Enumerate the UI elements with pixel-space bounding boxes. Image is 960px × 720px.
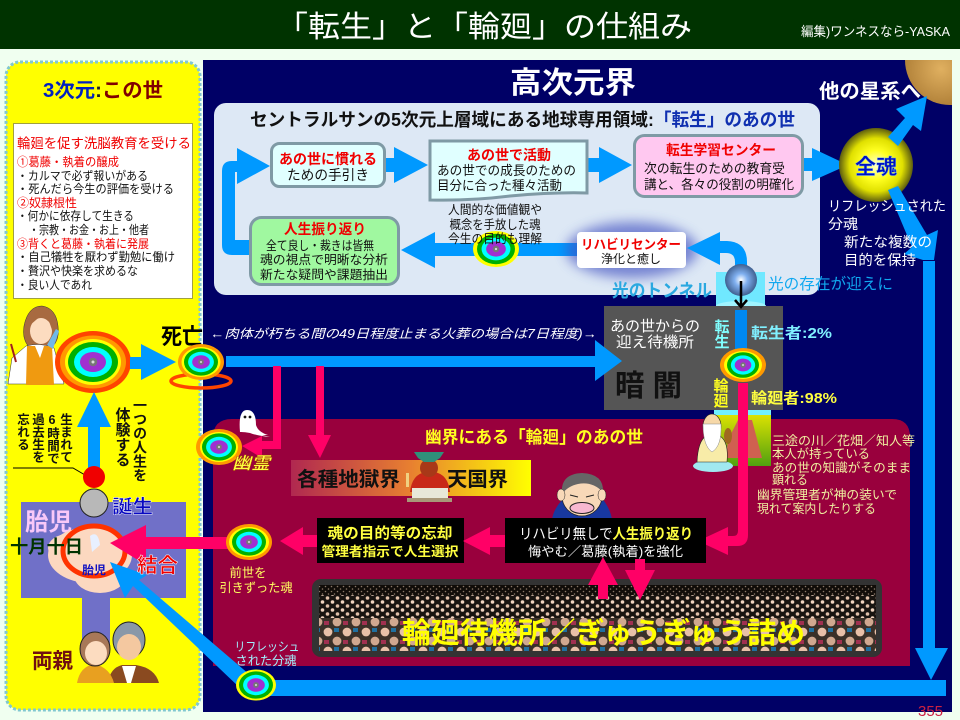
caption: refreshed split soul: 目的を保持 — [844, 252, 916, 268]
caption: refreshed split soul: リフレッシュされた — [828, 198, 946, 214]
caption: refreshed split soul: 新たな複数の — [844, 234, 932, 250]
label: ten months: 十月十日 — [10, 537, 83, 557]
box: life review — [250, 218, 398, 284]
icon: planet — [905, 60, 952, 105]
arrow: samsara path to review — [698, 383, 748, 555]
box: life review: 全て良し・裁きは皆無 — [266, 238, 374, 253]
box: rehabilitation center: リハビリセンター — [581, 237, 681, 252]
caption: soul dragging past life — [220, 565, 293, 595]
arrow: down from whole soul — [888, 186, 938, 260]
page number: 355 — [918, 703, 943, 720]
list items: ・カルマで必ず報いがある — [17, 168, 148, 183]
heading: central sun realm: セントラルサンの5次元上層域にある地球専用領域:「転生」のあの世 — [250, 110, 795, 130]
soul: at death — [171, 344, 231, 388]
heading: higher dimension: 高次元界 — [510, 67, 636, 100]
label: beings of light greet: 光の存在が迎えに — [768, 275, 893, 293]
arrow: life to death — [130, 344, 176, 380]
arrow: black descent — [735, 281, 747, 307]
header — [0, 0, 960, 49]
panel: central sun realm — [214, 103, 820, 295]
label: 2 percent: 転生者:2% — [751, 324, 832, 342]
panel: waiting place darkness: 迎え待機所 — [616, 334, 694, 351]
icon: King Enma — [406, 452, 452, 502]
icon: parents — [77, 622, 159, 683]
label: fetus small: 胎児 — [82, 563, 107, 577]
list items — [17, 154, 175, 292]
label: experience: 体験する — [114, 407, 130, 467]
box: review without rehab: リハビリ無しで人生振り返り — [519, 525, 693, 543]
credit: 編集)ワンネスなら-YASKA — [801, 24, 950, 39]
arrow: long return path — [265, 261, 948, 696]
arrow: to activities — [385, 147, 428, 183]
list items: ③背くと葛藤・執着に発展 — [17, 236, 149, 251]
panel: waiting crowd — [312, 579, 882, 657]
label: forget past life: 生まれて — [58, 412, 72, 463]
soul: after release — [473, 231, 519, 267]
list items: ・贅沢や快楽を求めるな — [17, 263, 138, 278]
caption: released soul: 人間的な価値観や — [448, 202, 542, 217]
panel: waiting place darkness: あの世からの — [610, 318, 700, 335]
icon: union ring — [63, 526, 125, 576]
icon: tunnel of light — [716, 264, 766, 311]
caption: soul dragging past life: 引きずった魂 — [220, 581, 293, 595]
label: reincarnation vertical: 転生 — [712, 318, 730, 349]
soul: living soul with ring — [55, 331, 131, 393]
label: fetus: 胎児 — [25, 509, 72, 536]
icon: birth circles — [80, 466, 108, 517]
label: tunnel of light: 光のトンネル — [612, 281, 712, 301]
icon: old sage guide — [693, 414, 733, 472]
caption: what appears in the other world — [757, 433, 915, 516]
list items: ・自己犠牲を厭わず勤勉に働け — [17, 249, 175, 264]
box: activities in the other world — [430, 141, 587, 200]
arrow: to other star systems — [888, 96, 927, 146]
box: review without rehab: 悔やむ／葛藤(執着)を強化 — [528, 544, 683, 559]
label: experiencing a life: 一つの人生を — [132, 398, 148, 482]
label: forget past life — [15, 412, 72, 464]
icon: orb of whole soul — [839, 128, 913, 202]
box: activities in the other world: あの世で活動 — [467, 147, 551, 163]
bar: hell and heaven: 各種地獄界 — [297, 467, 400, 491]
panel: waiting place darkness — [604, 306, 783, 410]
bar: hell and heaven — [291, 460, 531, 496]
label: crowded waiting place: 輪廻待機所／ぎゅうぎゅう詰め — [402, 617, 805, 650]
list heading: 輪廻を促す洗脳教育を受ける — [17, 136, 191, 151]
arrow: to ghost — [242, 366, 281, 458]
bar: hell and heaven: 天国界 — [447, 469, 508, 491]
panel: higher dimension — [203, 60, 952, 712]
arrow: death to waiting place — [226, 340, 622, 381]
label: forget past life: 過去生を — [30, 412, 44, 463]
soul: at tunnel exit — [720, 348, 766, 382]
caption: refreshed soul — [234, 640, 300, 668]
title: 「転生」と「輪廻」の仕組み — [276, 11, 692, 44]
soul: ghost soul — [196, 429, 242, 465]
arrow: up from crowd — [588, 557, 618, 599]
panel: realm of reincarnation (purple-red) — [213, 419, 910, 666]
box: forgetting purpose: 管理者指示で人生選択 — [322, 544, 458, 559]
arrow: tunnel to rehab center — [687, 232, 747, 270]
list items: ・死んだら今生の評価を受ける — [17, 181, 174, 196]
caption: soul dragging past life: 前世を — [230, 565, 266, 580]
label: forget past life: 忘れる — [15, 413, 29, 450]
list items: ・何かに依存して生きる — [17, 209, 134, 223]
caption: released soul: 今生の目的も理解 — [448, 231, 542, 246]
label: birth: 誕生 — [112, 496, 153, 518]
label: ghost: 幽霊 — [232, 454, 272, 473]
caption: refreshed soul: リフレッシュ — [234, 640, 300, 654]
arrow: birth to life — [77, 392, 111, 472]
label: death: 死亡 — [161, 324, 203, 349]
label: union: 結合 — [137, 554, 178, 577]
arrow: loop back to first box — [222, 148, 270, 255]
label: experiencing a life — [114, 398, 148, 482]
list items: ・良い人であれ — [17, 277, 92, 292]
box: life review: 魂の視点で明晰な分析 — [260, 253, 388, 267]
box: rehabilitation center — [566, 222, 698, 278]
box: reincarnation learning center: 転生学習センター — [666, 142, 776, 158]
arrow: to life review — [401, 232, 577, 268]
caption: what appears in the other world: 本人が持っている — [772, 446, 870, 461]
box: reincarnation learning center: 次の転生のための教育受 — [644, 161, 785, 176]
caption: what appears in the other world: あの世の知識がそのまま — [772, 460, 911, 475]
note: 49 days: ←肉体が朽ちる間の49日程度止まる火葬の場合は7日程度)→ — [210, 327, 597, 341]
box: reincarnation learning center: 講と、各々の役割の明確化 — [644, 177, 794, 192]
soul: refreshed split soul — [236, 670, 276, 700]
line: pointer — [13, 468, 85, 475]
panel: brainwashing list — [14, 124, 192, 298]
box: rehabilitation center: 浄化と癒し — [601, 252, 661, 266]
list items: ②奴隷根性 — [17, 196, 77, 210]
caption: what appears in the other world: 三途の川／花畑／知人等 — [772, 433, 915, 448]
picture: flower field — [714, 410, 771, 466]
arrow: refreshed soul to fetus — [110, 562, 250, 688]
panel: waiting place darkness: 暗 闇 — [615, 370, 682, 403]
caption: refreshed split soul — [828, 198, 946, 268]
box: review without rehab — [505, 518, 706, 563]
caption: refreshed soul: された分魂 — [236, 654, 297, 668]
label: forget past life: 6時間で — [45, 413, 59, 464]
box: getting used to the other world: あの世に慣れる — [279, 151, 377, 167]
arrow: down to crowd — [625, 559, 655, 600]
label: samsara vertical: 輪廻 — [712, 377, 728, 409]
arrow: to whole soul — [803, 148, 848, 181]
box: life review: 人生振り返り — [284, 221, 366, 237]
box: forgetting purpose: 魂の目的等の忘却 — [328, 524, 452, 542]
label: to other star systems: 他の星系へ — [819, 80, 921, 103]
heading: 3D this world: 3次元:この世 — [43, 79, 163, 102]
arrow: forgetting to soul — [280, 527, 317, 555]
arrow: review to forgetting — [463, 527, 505, 555]
box: reincarnation learning center — [634, 136, 802, 196]
icon: ghost — [240, 410, 270, 437]
caption: what appears in the other world: 幽界管理者が神の装いで — [757, 487, 897, 502]
caption: released soul: 概念を手放した魂 — [450, 217, 541, 232]
arrow: to hell and heaven — [308, 366, 331, 458]
label: 98 percent: 輪廻者:98% — [751, 389, 837, 407]
list items: ①葛藤・執着の醸成 — [17, 154, 119, 169]
box: getting used to the other world — [272, 144, 384, 186]
panel: 3D world — [6, 62, 200, 710]
caption: what appears in the other world: 顕れる — [772, 473, 808, 487]
soul: dragging past life — [226, 524, 272, 560]
box: activities in the other world: 目分に合った種々活動 — [437, 178, 562, 193]
list items: ・宗教・お金・お上・他者 — [29, 222, 149, 237]
icon: woman on the phone — [8, 306, 64, 385]
label: parents: 両親 — [32, 650, 73, 673]
panel: womb background — [21, 502, 186, 650]
box: activities in the other world: あの世での成長のための — [437, 163, 576, 178]
icon: troubled man — [552, 473, 612, 520]
arrow: soul to fetus — [110, 525, 232, 565]
box: getting used to the other world: ための手引き — [287, 167, 369, 183]
heading: samsara realm: 幽界にある「輪廻」のあの世 — [425, 428, 643, 447]
caption: refreshed split soul: 分魂 — [828, 216, 858, 232]
arrow: to learning center — [588, 147, 632, 183]
box: life review: 新たな疑問や課題抽出 — [260, 267, 388, 282]
box: forgetting purpose — [317, 518, 464, 563]
icon: fetus — [48, 527, 132, 593]
bar: reincarnation path — [735, 310, 747, 350]
caption: what appears in the other world: 現れて案内したりする — [757, 502, 876, 516]
caption: released soul — [448, 202, 542, 246]
icon: orb of whole soul: 全魂 — [855, 156, 897, 179]
